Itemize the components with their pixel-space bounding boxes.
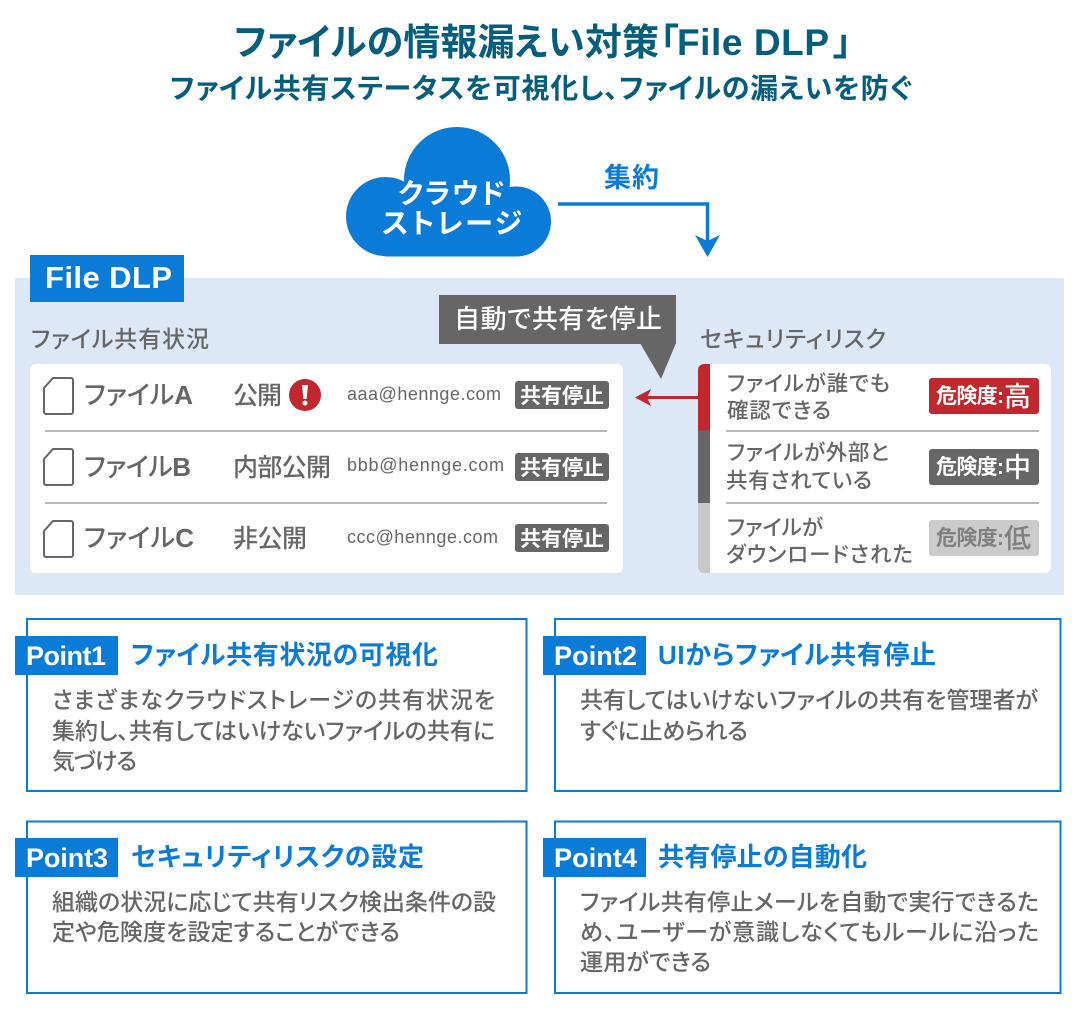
row: file B: 内部公開 [233,454,331,482]
panel: Point3: 定や危険度を設定することができる [52,919,400,945]
title: ファイルの情報漏えい対策 [234,22,659,63]
panel: Point2 [543,619,1060,791]
icon: cloud storage [346,127,551,256]
callout: auto stop sharing [439,295,676,379]
panel: Point1: Point1 [26,641,106,671]
risk: medium: 共有されている [726,469,872,493]
heading: file share status: ファイル共有状況 [31,326,209,352]
risk: medium: 中 [1004,453,1031,483]
risk: high [727,372,1039,423]
panel: Point3 [15,822,526,993]
heading: security risk: セキュリティリスク [700,326,886,352]
risk: medium: ファイルが外部と [727,441,889,465]
tag: File DLP: File DLP [45,260,172,295]
row: file C: 非公開 [233,525,307,553]
row: file B: ファイルB [84,452,191,482]
row: file C: 共有停止 [520,528,604,551]
panel: Point3: 組織の状況に応じて共有リスク検出条件の設 [52,889,496,915]
title: File DLP [677,22,829,63]
title: 」 [833,22,852,63]
panel: Point4: 運用ができる [580,949,711,975]
callout: auto stop sharing: 自動で共有を停止 [454,304,662,334]
icon: cloud storage: ストレージ [382,208,522,239]
panel: File DLP [15,255,1064,595]
risk: high: 高 [1004,382,1031,412]
panel: Point1: さまざまなクラウドストレージの共有状況を [52,687,495,713]
panel: Point1 [15,619,526,791]
panel: Point1: 気づける [52,748,137,774]
row: file A: ファイルA [84,380,193,410]
panel: Point4: め、ユーザーが意識しなくてもルールに沿った [580,919,1039,945]
risk: high: ファイルが誰でも [727,372,890,396]
panel: Point4: Point4 [554,843,637,873]
panel: security risk list [698,364,1051,573]
row: file B [44,449,609,485]
panel: Point3: セキュリティリスクの設定 [131,842,424,872]
arrow: cloud to File DLP [558,204,720,257]
panel: Point3: Point3 [26,843,108,873]
row: file A: aaa@hennge.com [347,384,501,404]
risk: low [726,516,1039,567]
row: file C [44,521,609,557]
risk: low: 危険度: [936,527,1004,550]
row: file A [44,378,609,414]
row: file B: bbb@hennge.com [347,455,504,475]
icon: cloud storage: クラウド [398,178,505,209]
risk: low: ダウンロードされた [726,543,913,567]
panel: Point1: 集約し、共有してはいけないファイルの共有に [52,718,495,744]
icon: alert [289,379,321,411]
panel: file list [30,364,623,573]
panel: Point1: ファイル共有状況の可視化 [131,640,438,670]
tag: File DLP [30,255,184,302]
title: 「 [660,22,678,63]
label: aggregate: 集約 [604,163,659,193]
risk: low: ファイルが [727,516,823,540]
risk: medium [726,441,1039,493]
risk: high: 確認できる [727,399,831,423]
panel: Point2: 共有してはいけないファイルの共有を管理者が [580,687,1038,713]
risk: medium: 危険度: [936,456,1004,479]
row: file A: 公開 [233,382,282,410]
risk: low: 低 [1004,524,1031,554]
panel: Point4 [543,822,1060,993]
row: file C: ccc@hennge.com [347,527,498,547]
panel: Point4: 共有停止の自動化 [658,842,867,872]
row: file A: 共有停止 [520,385,604,408]
arrow: risk to file [635,389,699,406]
panel: Point4: ファイル共有停止メールを自動で実行できるた [580,889,1039,915]
subtitle: ファイル共有ステータスを可視化し、ファイルの漏えいを防ぐ [170,73,912,104]
risk: high: 危険度: [936,385,1004,408]
row: file C: ファイルC [84,523,194,553]
panel: Point2: UIからファイル共有停止 [658,640,936,670]
panel: Point2: Point2 [554,641,637,671]
panel: Point2: すぐに止められる [580,718,748,744]
row: file B: 共有停止 [520,457,604,480]
